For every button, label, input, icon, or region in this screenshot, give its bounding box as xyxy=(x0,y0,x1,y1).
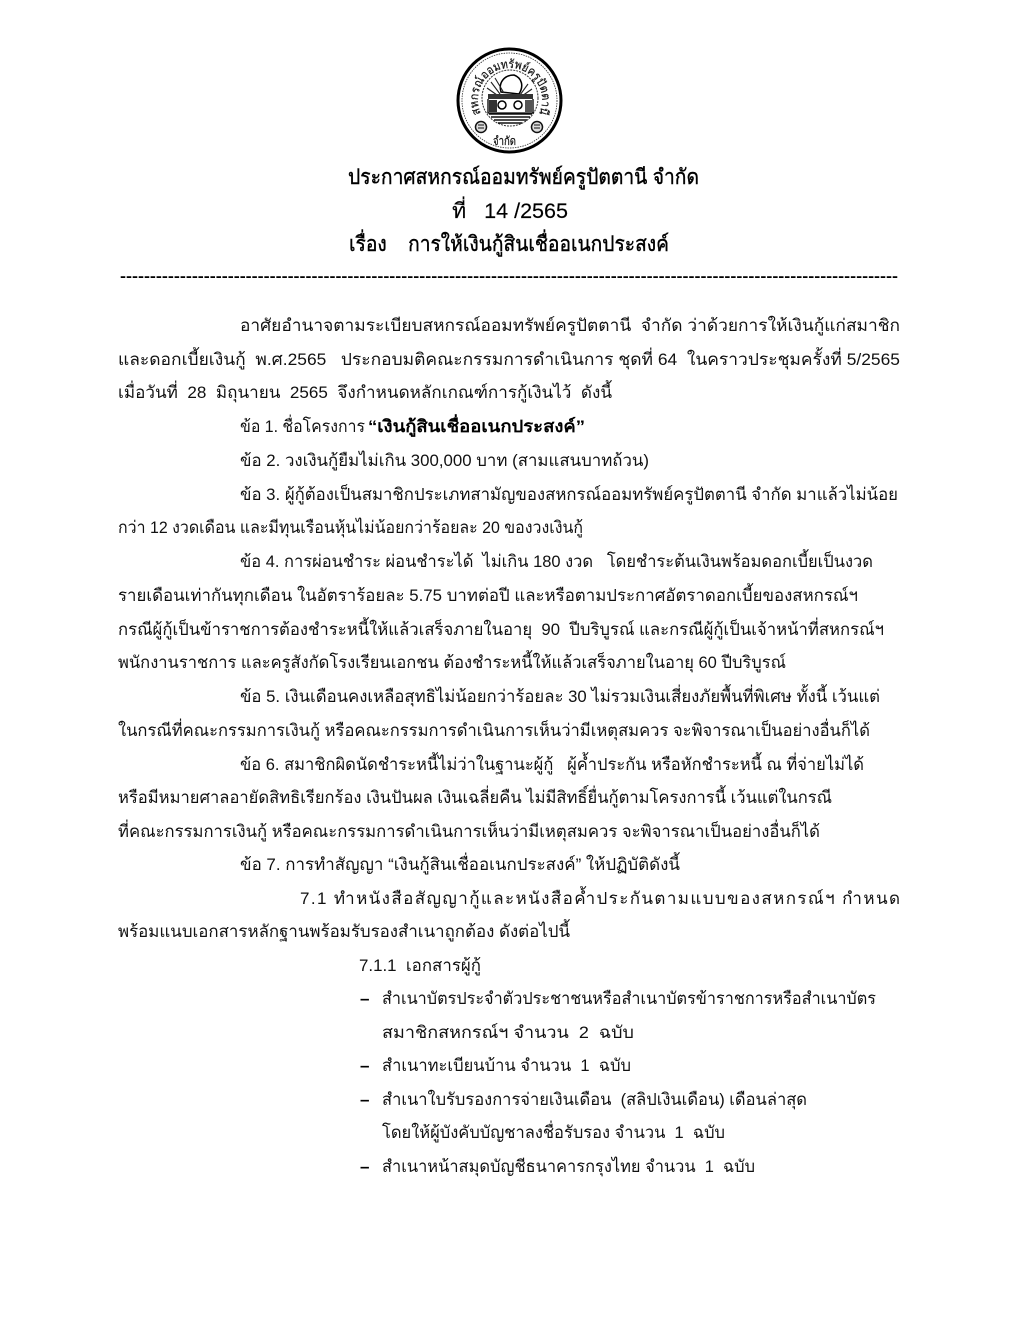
clause 4: repayment xyxy=(118,549,884,673)
clause 6: default conditions: หรือมีหมายศาลอายัดสิทธิเรียกร้อง เงินปันผล เงินเฉลี่ยคืน ไม่มีสิทธิ์ยื่นกู้ตามโครงการนี้ เว้นแต่ในกรณี xyxy=(118,785,832,808)
clause 6: default conditions: ที่คณะกรรมการเงินกู้ หรือคณะกรรมการดำเนินการเห็นว่ามีเหตุสมควร จะพิจารณาเป็นอย่างอื่นก็ได้ xyxy=(118,819,820,842)
heading: announcement title: ประกาศสหกรณ์ออมทรัพย์ครูปัตตานี จำกัด xyxy=(348,165,699,190)
clause 7.1: contract documents: 7.1 ทำหนังสือสัญญากู้และหนังสือค้ำประกันตามแบบของสหกรณ์ฯ กำหนด xyxy=(300,886,900,909)
clause 7.1: contract documents xyxy=(118,886,900,942)
list: required documents xyxy=(360,989,876,1177)
clause 5: net salary xyxy=(118,684,880,741)
clause 2: loan limit: ข้อ 2. วงเงินกู้ยืมไม่เกิน 300,000 บาท (สามแสนบาทถ้วน) xyxy=(240,450,649,471)
list: required documents: – xyxy=(360,989,369,1008)
list: required documents: สำเนาบัตรประจำตัวประชาชนหรือสำเนาบัตรข้าราชการหรือสำเนาบัตร xyxy=(382,989,876,1008)
clause 1: project name: ข้อ 1. ชื่อโครงการ xyxy=(240,414,365,436)
heading: announcement title: เรื่อง การให้เงินกู้สินเชื่ออเนกประสงค์ xyxy=(349,229,669,257)
list: required documents: – xyxy=(360,1157,369,1176)
dashed separator: ---------------------------------------------------------------------------------------------------------------------------------- xyxy=(120,268,898,285)
icon: cooperative seal logo xyxy=(456,48,562,154)
text block: preamble xyxy=(118,315,900,403)
clause 5: net salary: ในกรณีที่คณะกรรมการเงินกู้ หรือคณะกรรมการดำเนินการเห็นว่ามีเหตุสมควร จะพิจารณาเป็นอย่างอื่นก็ได้ xyxy=(118,718,870,741)
clause 5: net salary: ข้อ 5. เงินเดือนคงเหลือสุทธิไม่น้อยกว่าร้อยละ 30 ไม่รวมเงินเสี่ยงภัยพื้นที่พิเศษ ทั้งนี้ เว้นแต่ xyxy=(240,684,880,707)
clause 7: contract: ข้อ 7. การทำสัญญา “เงินกู้สินเชื่ออเนกประสงค์” ให้ปฏิบัติดังนี้ xyxy=(240,852,680,875)
clause 7.1: contract documents: พร้อมแนบเอกสารหลักฐานพร้อมรับรองสำเนาถูกต้อง ดังต่อไปนี้ xyxy=(118,919,570,942)
list: required documents: สำเนาทะเบียนบ้าน จำนวน 1 ฉบับ xyxy=(382,1056,631,1075)
clause 6: default conditions xyxy=(118,752,864,842)
list: required documents: สมาชิกสหกรณ์ฯ จำนวน 2 ฉบับ xyxy=(382,1023,634,1042)
clause 4: repayment: พนักงานราชการ และครูสังกัดโรงเรียนเอกชน ต้องชำระหนี้ให้แล้วเสร็จภายในอายุ 60 ปีบริบูรณ์ xyxy=(118,650,786,673)
list: required documents: – xyxy=(360,1056,369,1075)
heading: announcement title xyxy=(348,165,699,257)
list: required documents: โดยให้ผู้บังคับบัญชาลงชื่อรับรอง จำนวน 1 ฉบับ xyxy=(382,1120,725,1143)
list: required documents: สำเนาหน้าสมุดบัญชีธนาคารกรุงไทย จำนวน 1 ฉบับ xyxy=(382,1156,755,1177)
clause 4: repayment: ข้อ 4. การผ่อนชำระ ผ่อนชำระได้ ไม่เกิน 180 งวด โดยชำระต้นเงินพร้อมดอกเบี้ยเป็นงวด xyxy=(240,549,873,571)
subheading: borrower documents: 7.1.1 เอกสารผู้กู้ xyxy=(359,956,481,976)
clause 3: borrower qualifications xyxy=(118,483,898,538)
clause 4: repayment: กรณีผู้กู้เป็นข้าราชการต้องชำระหนี้ให้แล้วเสร็จภายในอายุ 90 ปีบริบูรณ์ และกรณีผู้กู้เป็นเจ้าหน้าที่สหกรณ์ฯ xyxy=(118,617,884,640)
list: required documents: – xyxy=(360,1090,369,1109)
text block: preamble: และดอกเบี้ยเงินกู้ พ.ศ.2565 ประกอบมติคณะกรรมการดำเนินการ ชุดที่ 64 ในคราวประชุมครั้งที่ 5/2565 xyxy=(118,347,900,370)
icon: cooperative seal logo: สหกรณ์ออมทรัพย์ครูปัตตานี xyxy=(471,58,550,116)
clause 1: project name: “เงินกู้สินเชื่ออเนกประสงค์” xyxy=(368,414,585,438)
clause 4: repayment: รายเดือนเท่ากันทุกเดือน ในอัตราร้อยละ 5.75 บาทต่อปี และหรือตามประกาศอัตราดอกเบี้ยของสหกรณ์ฯ xyxy=(118,583,858,606)
clause 3: borrower qualifications: ข้อ 3. ผู้กู้ต้องเป็นสมาชิกประเภทสามัญของสหกรณ์ออมทรัพย์ครูปัตตานี จำกัด มาแล้วไม่น้อย xyxy=(240,483,898,505)
text block: preamble: อาศัยอำนาจตามระเบียบสหกรณ์ออมทรัพย์ครูปัตตานี จำกัด ว่าด้วยการให้เงินกู้แก่สมาชิก xyxy=(240,315,900,336)
clause 6: default conditions: ข้อ 6. สมาชิกผิดนัดชำระหนี้ไม่ว่าในฐานะผู้กู้ ผู้ค้ำประกัน หรือหักชำระหนี้ ณ ที่จ่ายไม่ได้ xyxy=(240,752,864,775)
list: required documents: สำเนาใบรับรองการจ่ายเงินเดือน (สลิปเงินเดือน) เดือนล่าสุด xyxy=(382,1089,807,1110)
clause 3: borrower qualifications: กว่า 12 งวดเดือน และมีทุนเรือนหุ้นไม่น้อยกว่าร้อยละ 20 ของวงเงินกู้ xyxy=(118,517,583,538)
icon: cooperative seal logo: จำกัด xyxy=(493,134,516,148)
clause 1: project name xyxy=(240,414,585,438)
text block: preamble: เมื่อวันที่ 28 มิถุนายน 2565 จึงกำหนดหลักเกณฑ์การกู้เงินไว้ ดังนี้ xyxy=(118,380,612,403)
heading: announcement title: ที่ 14 /2565 xyxy=(452,196,568,223)
